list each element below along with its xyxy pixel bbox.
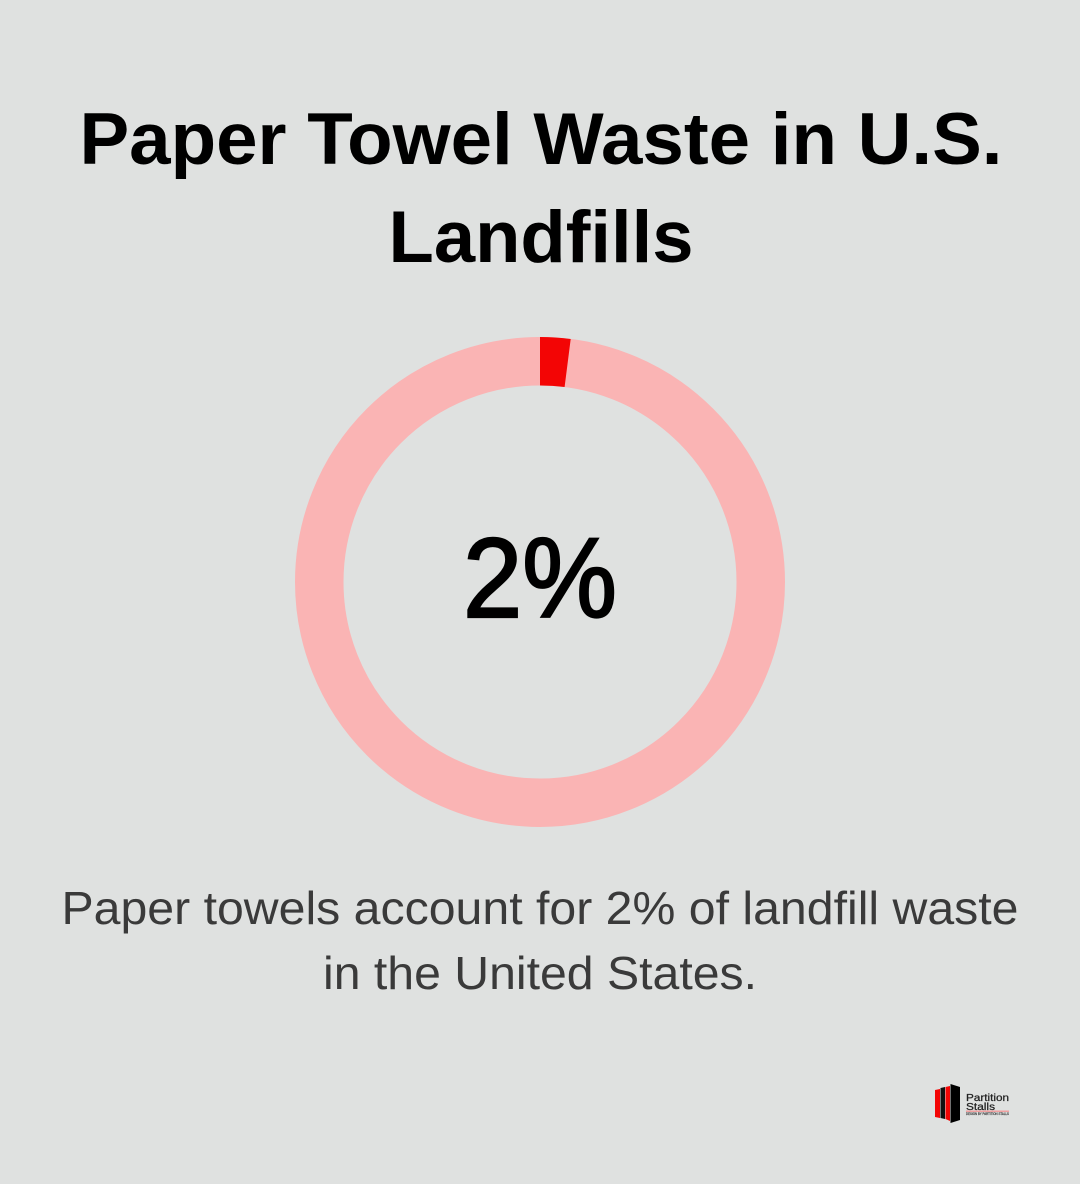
- logo tagline: DESIGN BY PARTITION STALLS: [966, 1112, 1009, 1116]
- donut highlighted segment: [540, 337, 571, 387]
- description text: in the United States.: [323, 947, 757, 999]
- logo icon: [935, 1084, 960, 1123]
- donut chart: 2% share: [319, 337, 761, 803]
- logo: Partition Stalls: Stalls: [966, 1102, 995, 1113]
- description text: Paper towels account for 2% of landfill waste: [62, 882, 1018, 934]
- logo underline: [966, 1110, 1009, 1112]
- title: Landfills: [388, 197, 694, 278]
- center value: 2%: [463, 515, 617, 641]
- title: Paper Towel Waste in U.S.: [80, 99, 1002, 180]
- donut track: [319, 361, 761, 803]
- title: [80, 99, 1002, 278]
- description text: [62, 882, 1018, 999]
- logo: Partition Stalls: [935, 1084, 1009, 1123]
- logo wordmark: Partition: [966, 1093, 1009, 1104]
